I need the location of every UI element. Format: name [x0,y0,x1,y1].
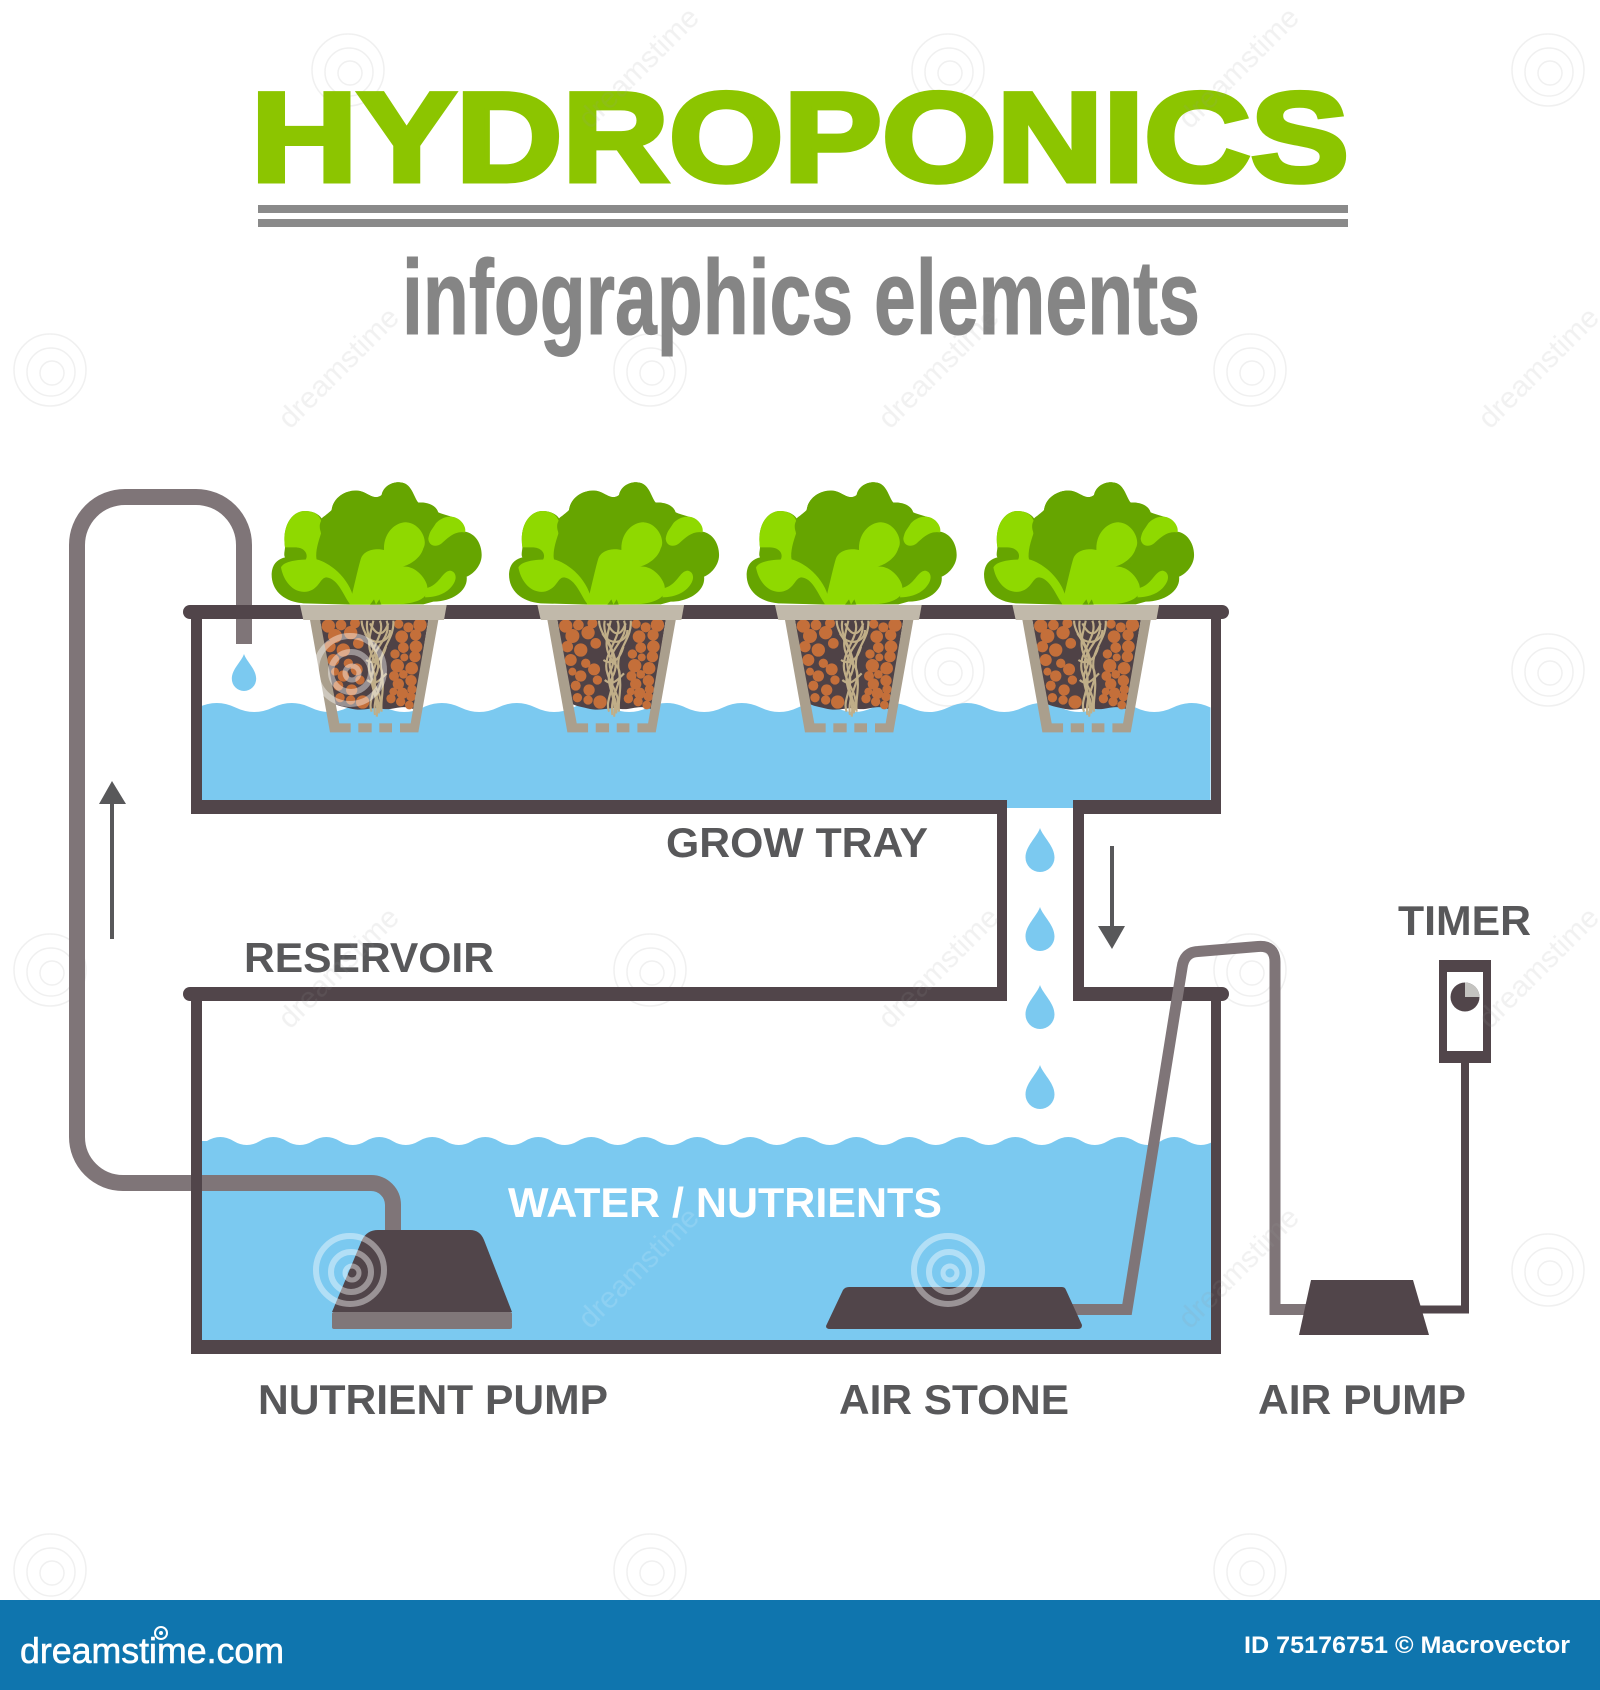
water drop: inlet [232,654,256,691]
plant 3 with pot [747,482,957,732]
watermark wordmarks [272,1,1600,1335]
water drops: falling [1026,828,1054,1109]
air tube [1072,946,1325,1310]
watermark wordmarks: dreamstime [872,901,1006,1035]
air stone [826,1287,1082,1329]
watermark spirals on artwork [316,636,982,1304]
arrow: down [1098,846,1125,949]
label: reservoir: RESERVOIR [244,934,494,981]
subtitle: infographics elements [402,239,1200,357]
watermark wordmarks: dreamstime [1172,1201,1306,1335]
title: HYDROPONICS [251,66,1349,208]
footer credit: ID 75176751 © Macrovector [1244,1632,1570,1659]
watermark wordmarks: dreamstime [572,1201,706,1335]
label: air stone: AIR STONE [839,1376,1069,1423]
footer bar [0,1600,1600,1690]
label: nutrient pump: NUTRIENT PUMP [258,1376,608,1423]
footer logo: dreamstime.com [20,1630,284,1671]
watermark wordmarks: dreamstime [272,901,406,1035]
drain channel walls and reservoir walls [183,800,1229,1354]
nutrient supply pipe [77,497,393,1234]
watermark wordmarks: dreamstime [572,1,706,135]
grow tray walls [183,605,1229,814]
timer wire [1405,1060,1465,1310]
label: air pump: AIR PUMP [1258,1376,1466,1423]
watermark wordmarks: dreamstime [1172,1,1306,135]
plant 4 with pot [984,482,1194,732]
label: grow tray: GROW TRAY [666,819,928,866]
label: timer: TIMER [1398,897,1531,944]
label: water and nutrients: WATER / NUTRIENTS [508,1179,942,1226]
watermark wordmarks: dreamstime [272,301,406,435]
plant 2 with pot [509,482,719,732]
water: grow tray [198,703,1210,808]
arrow: up [99,781,126,939]
water: reservoir [195,1137,1214,1342]
timer [1439,960,1491,1063]
nutrient pump [332,1230,512,1329]
title divider lines [258,205,1348,227]
watermark wordmarks: dreamstime [872,301,1006,435]
plant 1 with pot [272,482,482,732]
air pump [1299,1280,1429,1335]
